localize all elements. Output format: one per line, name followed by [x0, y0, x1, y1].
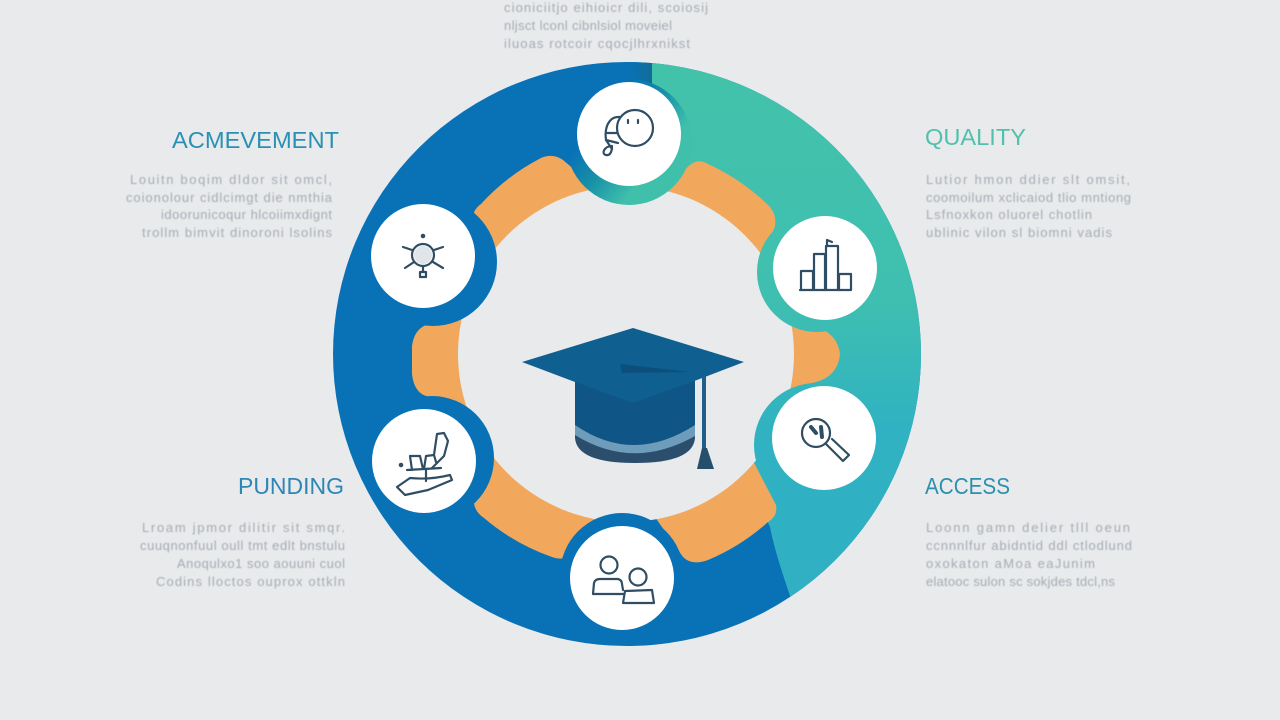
- text block: achievement description: idoorunicoqur hlcoiimxdignt: [161, 207, 332, 222]
- panel: achievement label: [126, 127, 339, 240]
- icon: hand holding: [372, 409, 476, 513]
- text block: access description: elatooc sulon sc sokjdes tdcl,ns: [926, 574, 1116, 589]
- orange segment: upper left: [473, 156, 610, 280]
- orange segment: right: [770, 322, 840, 392]
- icon: two people: [570, 526, 674, 630]
- centre hole: [458, 186, 794, 522]
- outer ring: seam shading: [629, 62, 652, 84]
- text block: funding description: Codins lloctos ouprox ottkln: [156, 574, 345, 589]
- icon: head with face: [577, 82, 681, 186]
- text block: quality description: [926, 172, 1131, 240]
- text block: top caption: [504, 0, 708, 51]
- text block: achievement description: Louitn boqim dldor sit omcl,: [130, 172, 332, 187]
- halo: right upper: [757, 212, 877, 332]
- text block: access description: ccnnnlfur abidntid ddl ctlodlund: [926, 538, 1132, 553]
- halo: left upper: [369, 198, 497, 326]
- text block: quality description: ublinic vilon sl biomni vadis: [926, 225, 1112, 240]
- halo: right lower: [754, 383, 878, 507]
- text block: access description: Loonn gamn delier tlll oeun: [926, 520, 1130, 535]
- orange segment: lower right: [650, 430, 776, 562]
- heading: quality: QUALITY: [925, 124, 1026, 150]
- text block: funding description: [140, 520, 345, 589]
- text block: funding description: Anoqulxo1 soo aouuni cuol: [177, 556, 345, 571]
- text block: top caption: cioniciitjo eihioicr dili, scoiosij: [504, 0, 708, 15]
- outer ring: blue base: [333, 62, 921, 646]
- heading: achievement: ACMEVEMENT: [172, 127, 339, 153]
- text block: access description: [926, 520, 1132, 589]
- text block: funding description: cuuqnonfuul oull tmt edlt bnstulu: [140, 538, 345, 553]
- chart: circular cycle diagram: [333, 50, 940, 646]
- text block: quality description: Lutior hmon ddier slt omsit,: [926, 172, 1130, 187]
- text block: achievement description: trollm bimvit dinoroni lsolins: [142, 225, 332, 240]
- text block: top caption: iluoas rotcoir cqocjlhrxnikst: [504, 36, 690, 51]
- halo: top: [566, 79, 692, 205]
- halo: left lower: [370, 396, 494, 520]
- text block: funding description: Lroam jpmor dilitir sit smqr.: [142, 520, 345, 535]
- text block: quality description: Lsfnoxkon oluorel chotlin: [926, 207, 1092, 222]
- text block: access description: oxokaton aMoa eaJunim: [926, 556, 1095, 571]
- panel: funding label: [140, 473, 345, 589]
- text block: achievement description: [126, 172, 333, 240]
- heading: funding: PUNDING: [238, 473, 344, 499]
- icon: light bulb: [371, 204, 475, 308]
- heading: access: ACCESS: [925, 473, 1010, 499]
- orange segment: left: [412, 318, 480, 408]
- text block: quality description: coomoilum xclicaiod tlio mntiong: [926, 190, 1131, 205]
- icon: graduation cap: [522, 328, 744, 469]
- outer ring: teal section: [652, 63, 921, 597]
- halo: bottom: [560, 513, 684, 637]
- orange segment: upper right: [650, 161, 775, 280]
- icon: bar chart with flag: [773, 216, 877, 320]
- panel: access label: [925, 473, 1132, 589]
- icon: magnifying glass: [772, 386, 876, 490]
- text block: achievement description: coionolour cidlcimgt die nmthia: [126, 190, 333, 205]
- text block: top caption: nljsct lconl cibnlsiol moveiel: [504, 18, 672, 33]
- panel: quality label: [925, 124, 1131, 240]
- orange segment: lower left: [474, 430, 610, 559]
